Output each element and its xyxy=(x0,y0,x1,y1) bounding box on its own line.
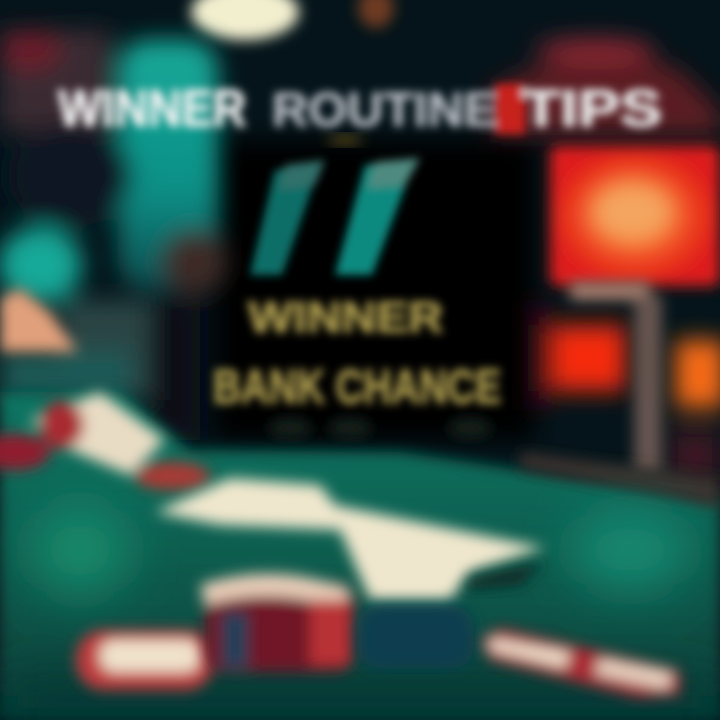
card shadow xyxy=(465,562,545,590)
felt highlights xyxy=(0,505,720,720)
sign pole xyxy=(570,282,662,475)
scattered cards and chips, left xyxy=(0,392,210,490)
red roof sign xyxy=(490,38,720,135)
gold text: WINNER xyxy=(248,293,443,342)
teal sevens xyxy=(250,158,420,275)
title: TIPS xyxy=(522,80,662,138)
red neon sign xyxy=(550,146,720,286)
lower neon panels xyxy=(530,300,720,480)
poker table felt xyxy=(0,392,720,720)
chip stack, right xyxy=(480,628,680,698)
peach lamp shape xyxy=(0,288,78,352)
gold text xyxy=(213,293,501,414)
gold text: BANK CHANCE xyxy=(213,361,501,414)
small gold mark xyxy=(327,135,363,145)
title xyxy=(58,80,662,138)
chip stack, left xyxy=(76,630,214,690)
playing cards, centre xyxy=(155,478,545,600)
title: ROUTINE xyxy=(272,84,497,137)
chip stack, centre xyxy=(200,574,355,672)
ceiling lights xyxy=(191,0,394,40)
table edge xyxy=(520,452,720,508)
title: WINNER xyxy=(58,80,246,138)
left wall: teal column and dark figures xyxy=(0,30,227,440)
faint blobs under the gold text xyxy=(268,418,492,438)
dark chips xyxy=(358,606,473,668)
